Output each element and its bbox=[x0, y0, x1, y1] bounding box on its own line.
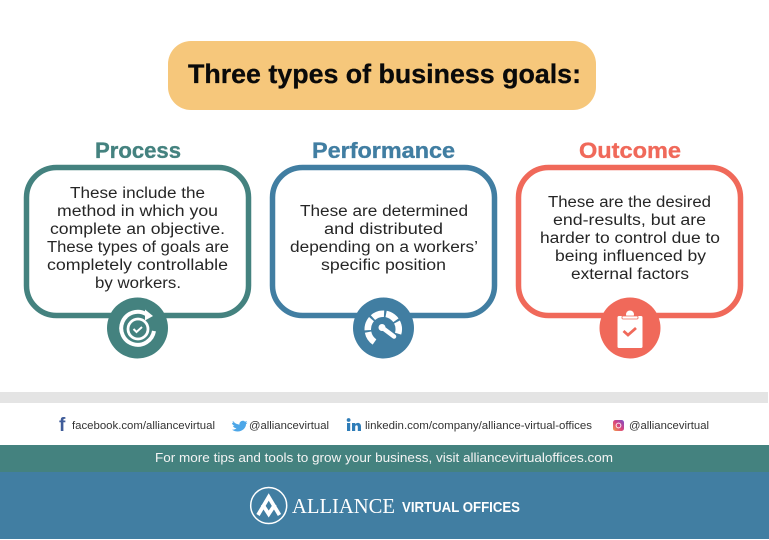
process text bbox=[47, 185, 229, 292]
performance text: These are determined bbox=[300, 203, 468, 220]
process card bbox=[26, 168, 248, 316]
performance text: and distributed bbox=[324, 221, 443, 238]
twitter link: @alliancevirtual bbox=[249, 420, 329, 432]
heading: performance: Performance bbox=[312, 138, 455, 163]
brand footer bbox=[0, 472, 769, 539]
heading: process: Process bbox=[95, 138, 181, 163]
panel: process bbox=[26, 138, 248, 358]
linkedin link: linkedin.com/company/alliance-virtual-offices bbox=[365, 420, 593, 432]
logo wordmark: ALLIANCE bbox=[292, 494, 395, 518]
title pill bbox=[168, 41, 596, 110]
facebook link: f bbox=[59, 415, 66, 436]
outcome text: being influenced by bbox=[555, 248, 706, 265]
outcome text: harder to control due to bbox=[540, 230, 720, 247]
facebook link: facebook.com/alliancevirtual bbox=[72, 420, 215, 432]
outcome card bbox=[518, 168, 740, 316]
icon: cycle with check bbox=[107, 298, 168, 358]
social links bbox=[59, 415, 709, 436]
logo mark bbox=[251, 488, 287, 524]
performance card bbox=[272, 168, 494, 316]
process text: complete an objective. bbox=[50, 221, 225, 238]
outcome text bbox=[540, 194, 720, 283]
performance text: specific position bbox=[321, 257, 446, 274]
outcome text: These are the desired bbox=[548, 194, 711, 211]
facebook link bbox=[59, 415, 215, 436]
process text: method in which you bbox=[57, 203, 218, 220]
icon: clipboard bbox=[600, 298, 660, 358]
brand footer: VIRTUAL OFFICES bbox=[402, 500, 520, 516]
outcome text: external factors bbox=[571, 266, 689, 283]
divider band bbox=[0, 392, 768, 403]
icon: gauge bbox=[353, 298, 414, 358]
panel: outcome bbox=[518, 138, 740, 358]
heading: outcome: Outcome bbox=[579, 138, 681, 163]
call to action band bbox=[0, 445, 769, 472]
process text: completely controllable bbox=[47, 257, 228, 274]
call to action band: For more tips and tools to grow your business, visit alliancevirtualoffices.com bbox=[155, 451, 613, 465]
performance text bbox=[290, 203, 478, 274]
title pill: Three types of business goals: bbox=[188, 59, 581, 89]
outcome text: end-results, but are bbox=[553, 212, 706, 229]
process text: These include the bbox=[70, 185, 205, 202]
process text: by workers. bbox=[95, 275, 181, 292]
performance text: depending on a workers’ bbox=[290, 239, 478, 256]
panel: performance bbox=[272, 138, 494, 358]
process text: These types of goals are bbox=[47, 239, 229, 256]
instagram link: @alliancevirtual bbox=[629, 420, 709, 432]
